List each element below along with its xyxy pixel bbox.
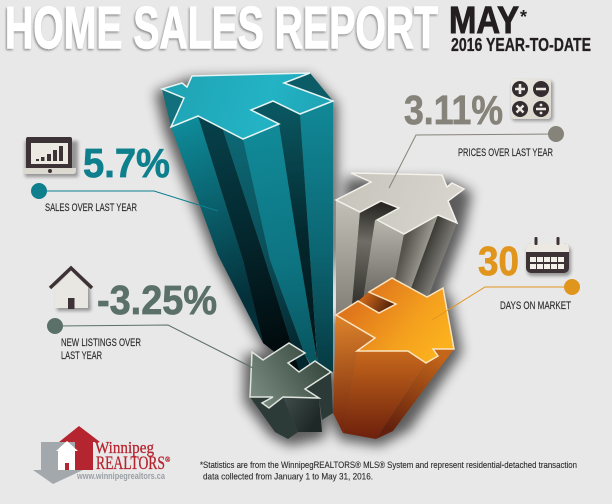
label: sales: SALES OVER LAST YEAR <box>45 202 137 214</box>
logo wordmark: Winnipeg <box>95 438 154 457</box>
callout: days on market <box>432 237 580 320</box>
teal rooftop <box>162 73 333 139</box>
stat: sales: 5.7% <box>83 140 170 186</box>
label: prices: PRICES OVER LAST YEAR <box>458 147 553 159</box>
icon: calendar <box>526 237 571 276</box>
marker: sales <box>31 183 47 199</box>
footnote: data collected from January 1 to May 31, 2016. <box>203 472 373 482</box>
column: prices (grey) <box>336 173 464 325</box>
icon: calculator keys <box>511 79 553 121</box>
slate rooftop <box>250 343 331 408</box>
label: listings: NEW LISTINGS OVER <box>61 337 141 349</box>
stat: prices: 3.11% <box>404 87 503 133</box>
marker: days <box>564 279 580 295</box>
leader line: prices <box>389 134 556 188</box>
leader line: days <box>432 287 572 320</box>
logo white house <box>56 441 78 470</box>
callout: new listings <box>47 268 253 368</box>
label: listings <box>61 337 141 362</box>
footnote <box>200 460 577 482</box>
logo: Winnipeg Realtors <box>33 426 171 484</box>
icon: house <box>50 268 92 311</box>
month heading: * <box>520 7 527 27</box>
label: listings: LAST YEAR <box>61 350 102 362</box>
orange rooftop <box>336 278 454 363</box>
grey rooftop <box>336 173 464 234</box>
column shadows <box>155 76 472 446</box>
leader line: listings <box>55 325 253 368</box>
logo red house <box>59 426 100 470</box>
logo url: www.winnipegrealtors.ca <box>76 471 166 481</box>
stat: days: 30 <box>478 238 519 284</box>
callout: prices <box>389 79 564 188</box>
logo arrow <box>33 442 83 484</box>
column: listings (slate) <box>250 343 333 439</box>
logo wordmark: ® <box>165 456 171 464</box>
marker: listings <box>47 318 63 334</box>
chart: 3D house columns <box>155 73 472 446</box>
stat: listings: -3.25% <box>97 277 217 323</box>
logo wordmark <box>95 438 171 474</box>
marker: prices <box>548 126 564 142</box>
column: days (orange) <box>333 278 454 439</box>
icon: laptop chart <box>23 137 78 177</box>
logo wordmark: REALTORS <box>96 453 165 474</box>
callout: sales <box>23 137 218 214</box>
leader line: sales <box>39 191 218 211</box>
label: days: DAYS ON MARKET <box>500 300 571 312</box>
month heading: MAY <box>449 0 519 42</box>
column: sales (teal) <box>162 73 333 380</box>
